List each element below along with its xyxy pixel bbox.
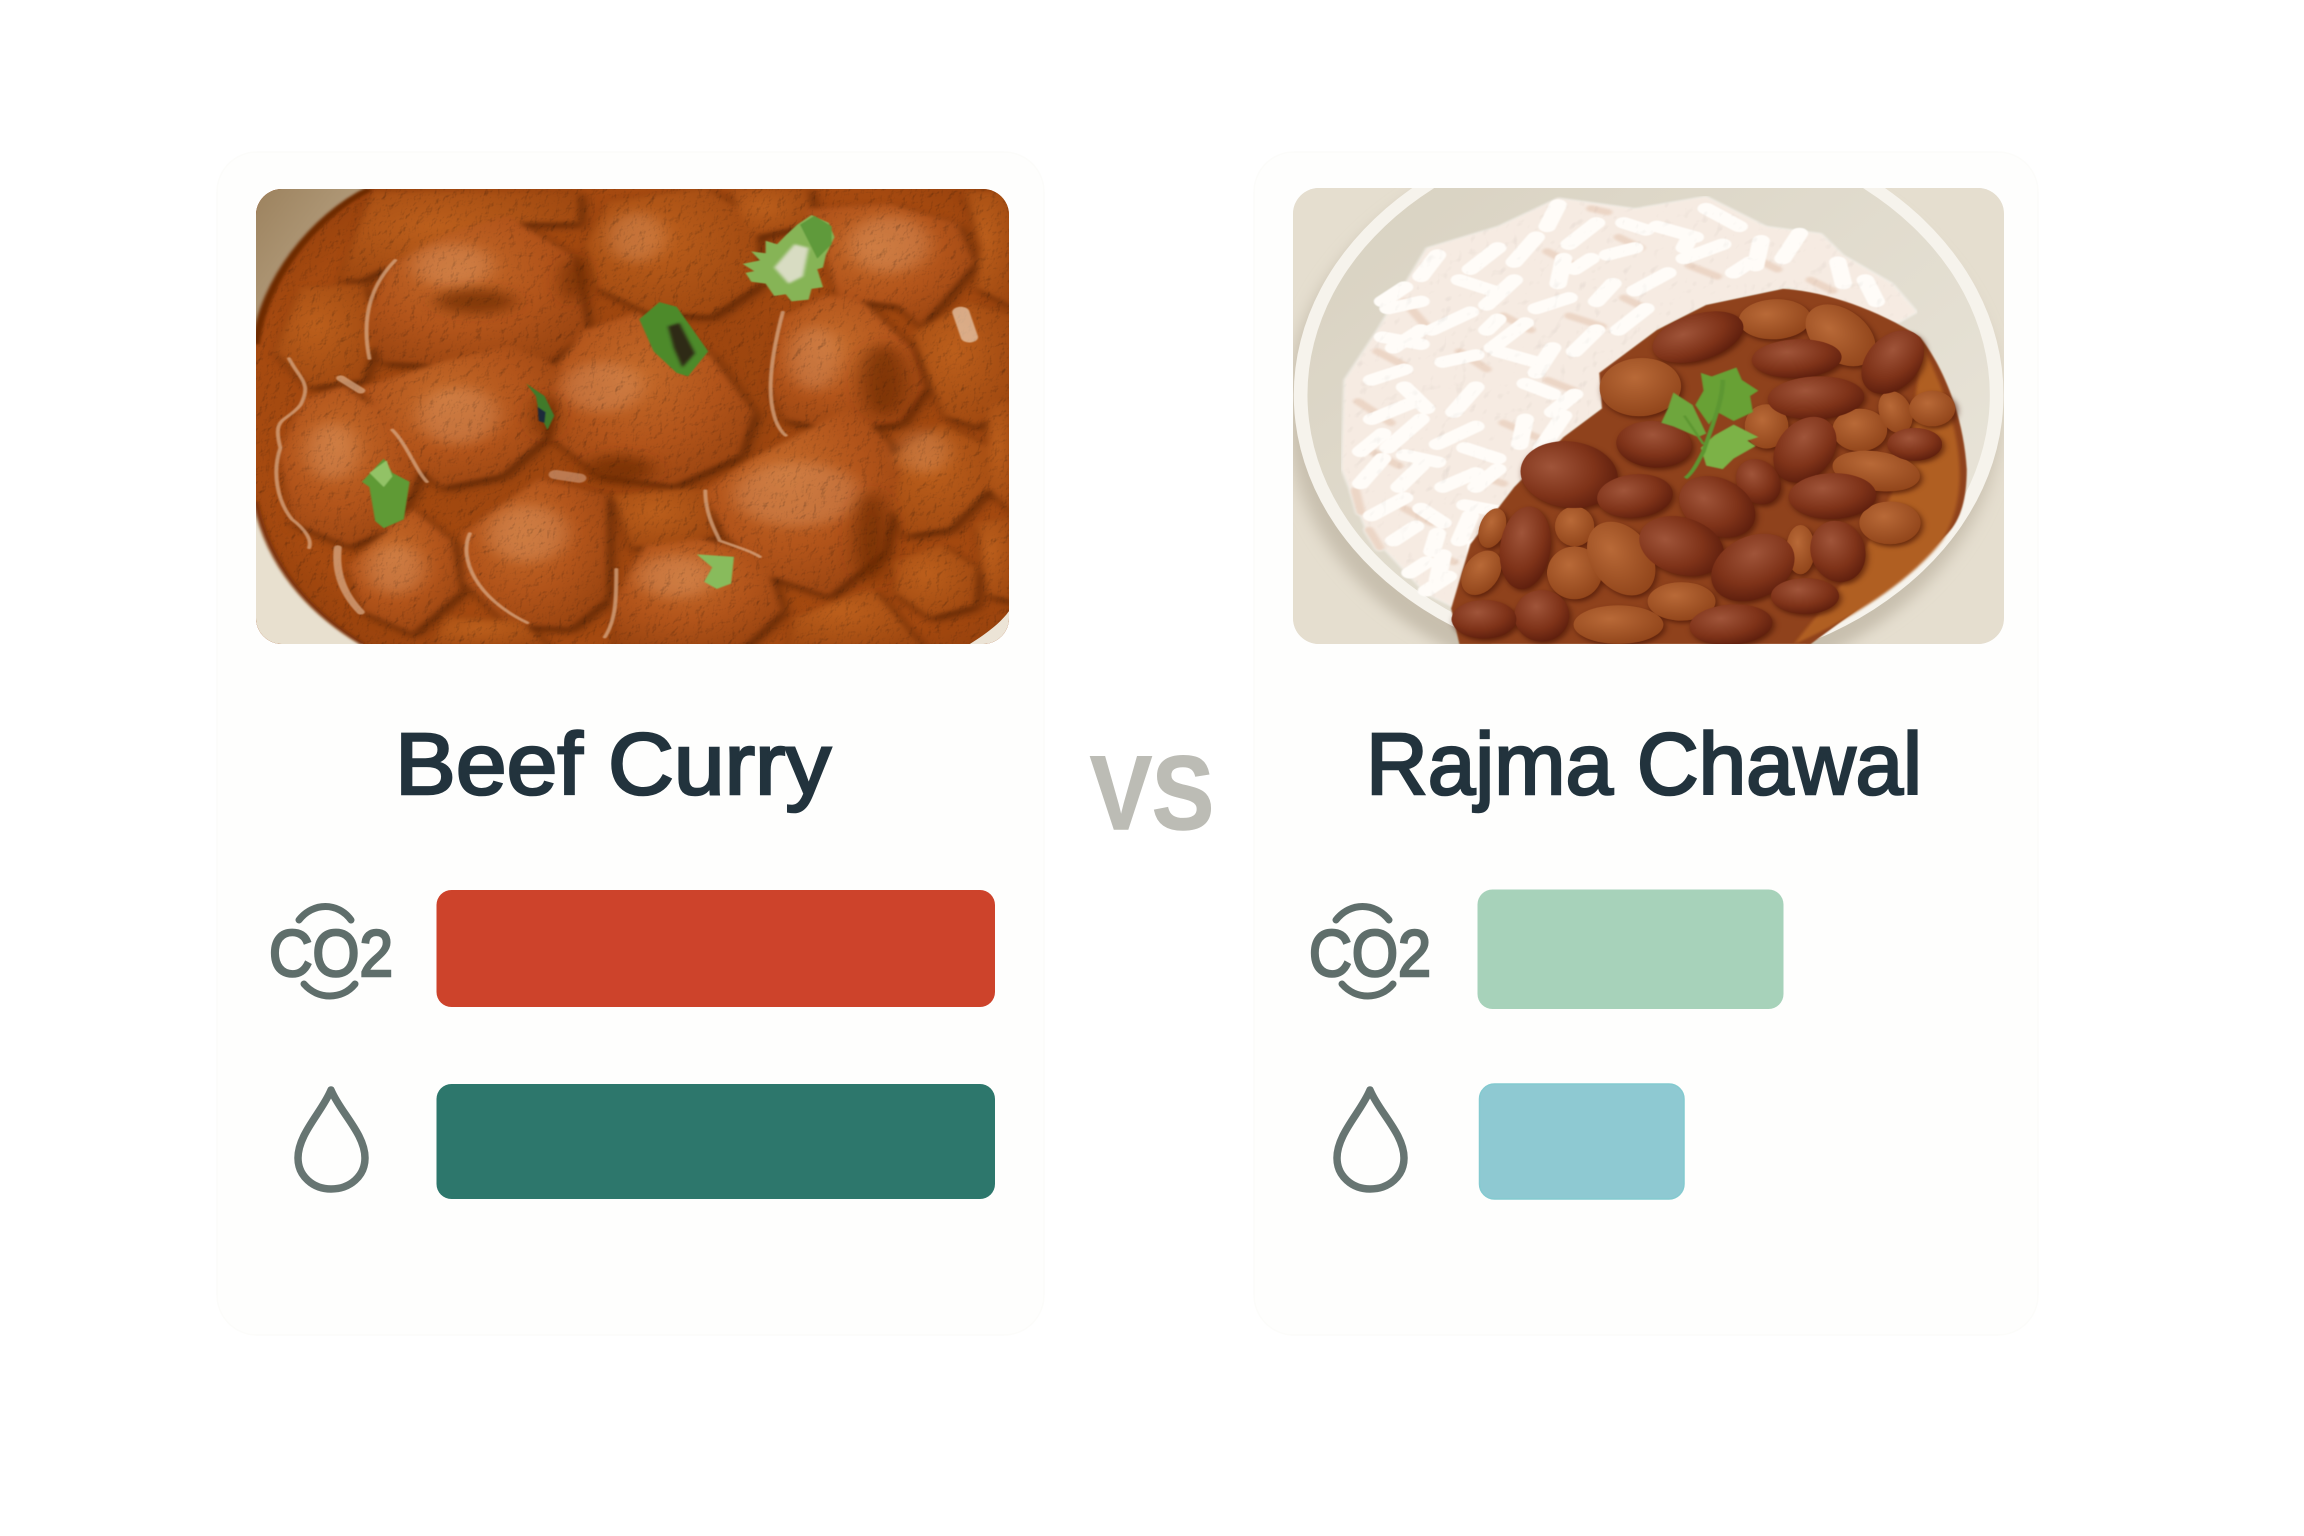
panel: rajma chawal [1254,118,2038,1335]
card: rajma chawal [1254,152,2038,1335]
icon: water drop [1337,1090,1404,1189]
heading: Beef Curry: Beef Curry [395,716,832,813]
label: VS: VS [1090,735,1214,852]
bar: water rajma [1480,1084,1684,1199]
icon: water drop [298,1090,365,1189]
rice [1341,196,1917,609]
photo: rajma chawal [1293,188,2004,644]
photo: beef curry [256,187,1015,648]
cream streaks in sauce [276,260,969,637]
cilantro leaves [362,215,834,589]
icon: CO2: CO2 [269,916,393,990]
icon: CO2: CO2 [1309,916,1431,990]
bar: water beef [436,1084,995,1199]
heading: Rajma Chawal: Rajma Chawal [1366,716,1922,813]
parsley [1661,367,1758,478]
glossy highlights [306,212,949,598]
bar: CO2 rajma [1478,890,1784,1009]
card: beef curry [217,152,1044,1335]
panel: beef curry [217,152,1044,1335]
bean curry [1451,289,1967,644]
bar: CO2 beef [436,890,995,1007]
